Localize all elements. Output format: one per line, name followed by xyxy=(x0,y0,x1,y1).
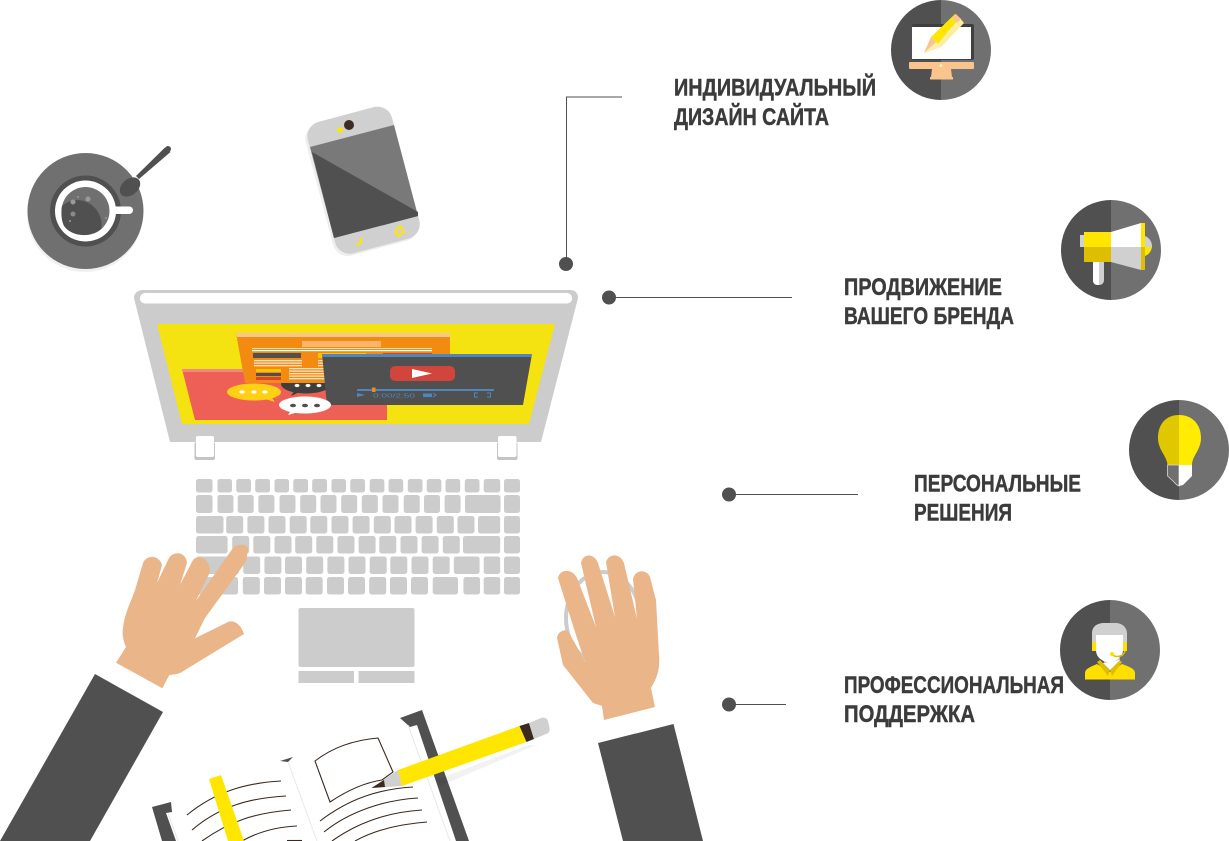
chat bubble: white xyxy=(279,396,331,415)
item: personal solutions xyxy=(914,400,1229,526)
heading: individual design: ИНДИВИДУАЛЬНЫЙ xyxy=(674,74,876,102)
laptop screen and lid xyxy=(134,290,578,460)
screen wallpaper xyxy=(157,324,555,424)
notebook cover xyxy=(152,710,469,841)
item: professional support xyxy=(844,600,1160,728)
connector: support xyxy=(722,698,786,712)
dark bubble dots xyxy=(294,384,322,387)
icon: monitor with pencil xyxy=(891,0,991,100)
notebook xyxy=(152,710,469,841)
mouse xyxy=(566,572,640,664)
orange window xyxy=(236,333,450,383)
keyboard xyxy=(196,479,520,594)
item: brand promotion xyxy=(844,200,1161,330)
connector: solutions xyxy=(722,488,858,502)
subheading: personal solutions: РЕШЕНИЯ xyxy=(914,500,1012,526)
connector: promotion xyxy=(602,290,792,304)
video player window xyxy=(322,354,532,405)
left sleeve xyxy=(0,674,163,841)
notebook writing lines xyxy=(187,781,427,841)
icon: coffee cup on saucer xyxy=(27,146,171,272)
pencil xyxy=(372,718,550,788)
notebook page edges xyxy=(168,725,450,841)
red window xyxy=(182,369,387,420)
connector: design xyxy=(559,97,622,271)
chat bubble: yellow xyxy=(227,384,281,402)
right sleeve xyxy=(598,724,703,841)
icon: smartphone xyxy=(302,103,423,259)
heading: professional support: ПРОФЕССИОНАЛЬНАЯ xyxy=(844,672,1064,699)
subheading: individual design: ДИЗАЙН САЙТА xyxy=(674,103,829,131)
right hand xyxy=(557,555,659,720)
heading: personal solutions: ПЕРСОНАЛЬНЫЕ xyxy=(914,470,1081,498)
bookmark ribbon xyxy=(209,775,244,841)
notebook sketch xyxy=(315,738,393,802)
icon: support agent xyxy=(1060,600,1160,700)
touchpad xyxy=(298,608,414,683)
heading: brand promotion: ПРОДВИЖЕНИЕ xyxy=(844,274,1002,301)
video player window: 0:00/2:50 xyxy=(373,394,415,400)
icon: megaphone xyxy=(1061,200,1161,300)
hinges xyxy=(194,436,518,460)
icon: light bulb xyxy=(1129,400,1229,500)
subheading: professional support: ПОДДЕРЖКА xyxy=(844,701,975,728)
left hand xyxy=(116,545,248,688)
subheading: brand promotion: ВАШЕГО БРЕНДА xyxy=(844,303,1014,330)
chat bubble: dark xyxy=(281,374,331,396)
item: individual design xyxy=(674,0,991,131)
